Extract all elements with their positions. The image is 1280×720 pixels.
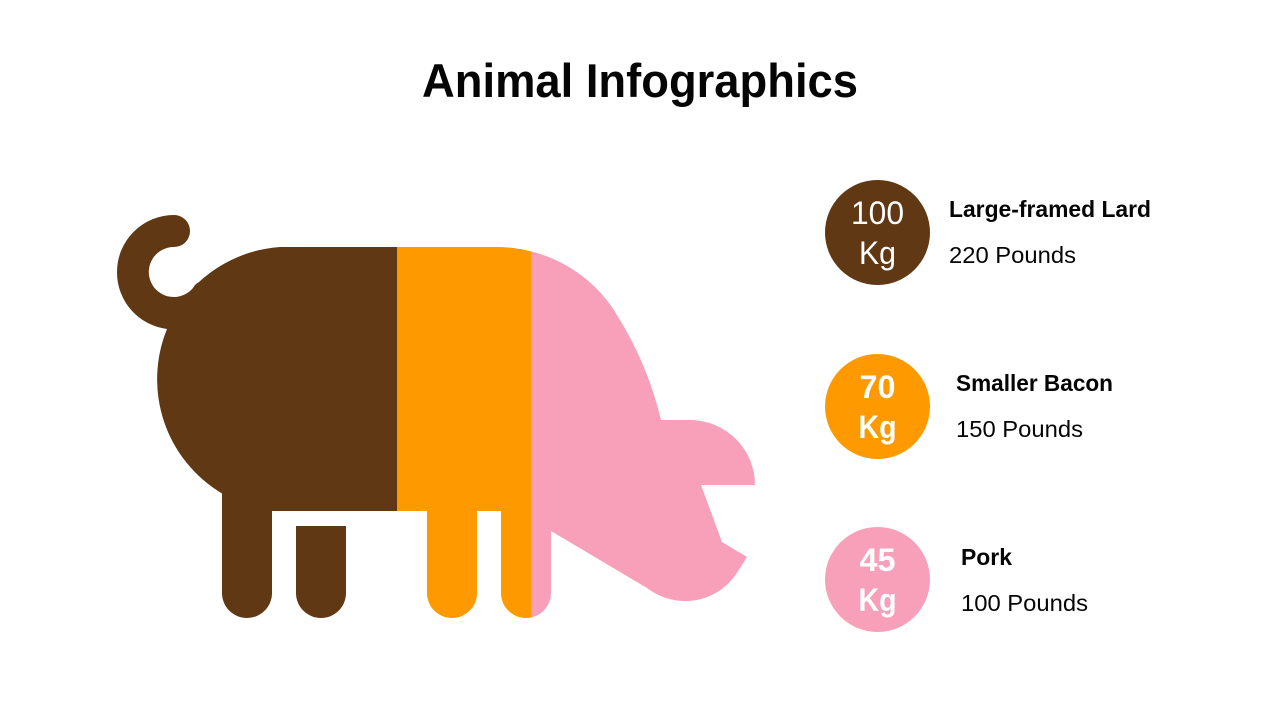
label: smaller bacon: Smaller Bacon [956, 370, 1113, 396]
title: Animal Infographics [422, 54, 858, 107]
pig section: pink head and front leg [532, 252, 755, 618]
badge: 70 Kg [825, 354, 930, 459]
pig section: brown rear with tail and legs [117, 215, 397, 618]
value: 100 pounds: 100 Pounds [961, 590, 1088, 616]
label: large-framed lard: Large-framed Lard [949, 196, 1151, 222]
stat: pork [825, 527, 1088, 632]
badge: 100 Kg: 100 [851, 195, 904, 231]
pig illustration [117, 215, 755, 618]
badge: 100 Kg: Kg [859, 235, 896, 271]
badge: 45 Kg: 45 [860, 542, 896, 578]
stat: large-framed lard [825, 180, 1151, 285]
badge: 100 Kg [825, 180, 930, 285]
stat: smaller bacon [825, 354, 1113, 459]
label: pork: Pork [961, 544, 1012, 570]
badge: 70 Kg: Kg [858, 409, 896, 445]
value: 150 pounds: 150 Pounds [956, 416, 1083, 442]
badge: 70 Kg: 70 [860, 369, 896, 405]
badge: 45 Kg: Kg [858, 582, 896, 618]
badge: 45 Kg [825, 527, 930, 632]
value: 220 pounds: 220 Pounds [949, 242, 1076, 268]
pig section: orange middle with legs [397, 247, 532, 618]
